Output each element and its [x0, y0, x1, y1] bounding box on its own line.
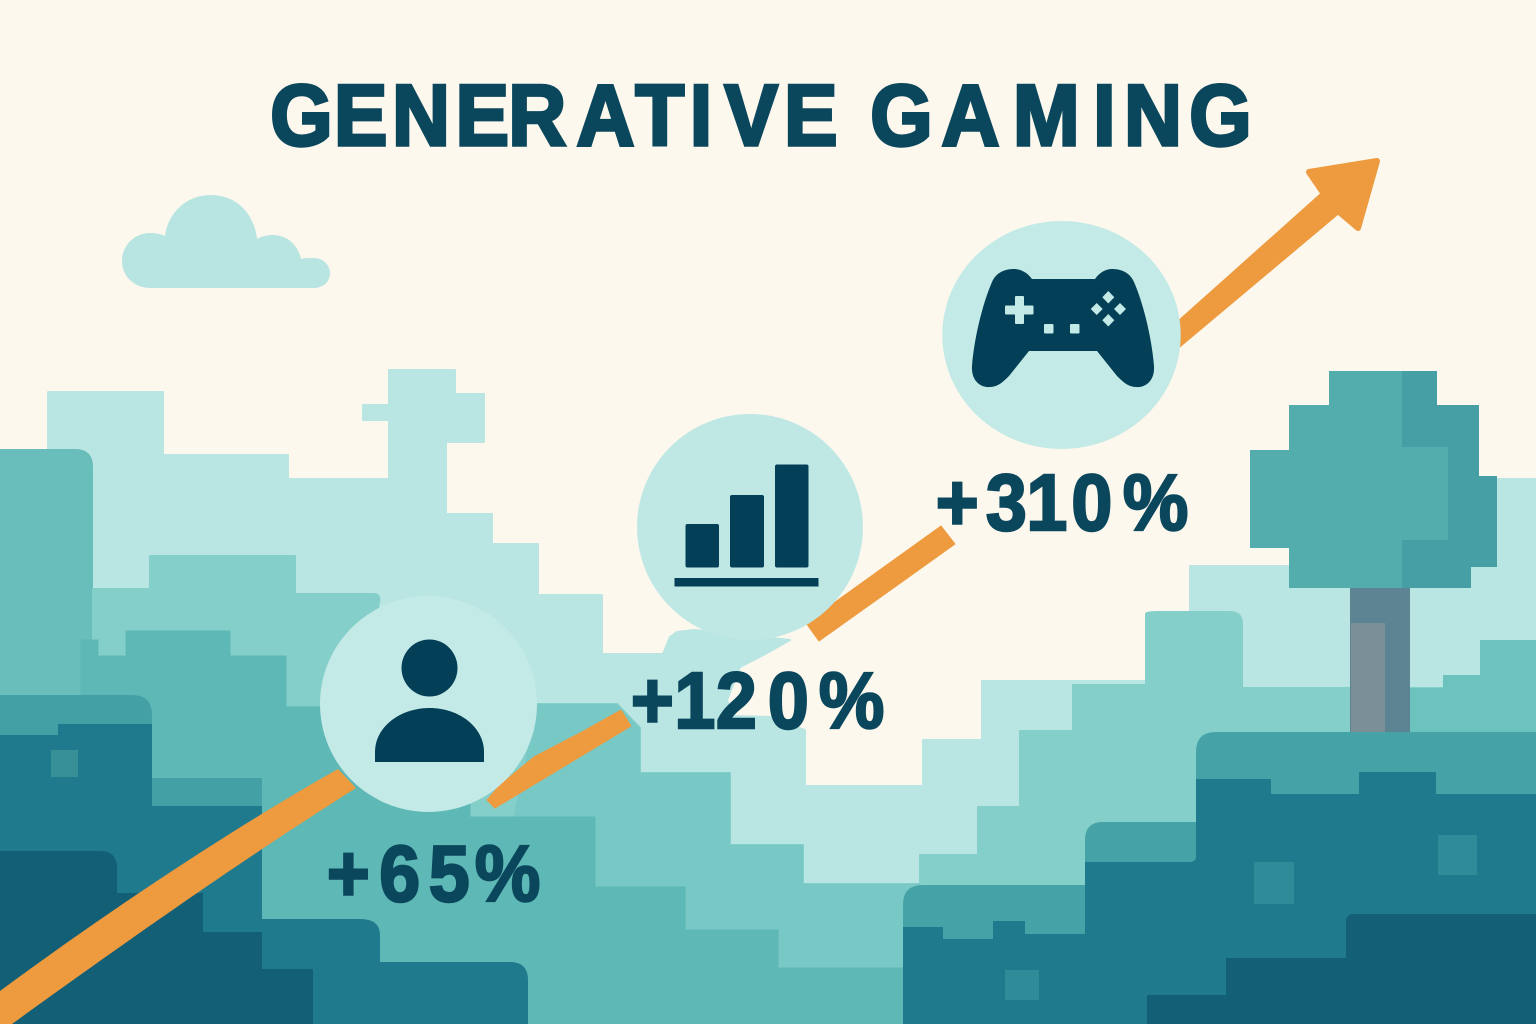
chart bars	[674, 464, 818, 586]
tree trunk	[1350, 587, 1410, 732]
stat: plus 120 percent: +120%	[631, 656, 884, 746]
arrow: growth line head	[1170, 161, 1377, 352]
panel: pixel landscape	[0, 370, 1536, 1024]
person head	[402, 640, 458, 696]
darkest hill right	[1147, 914, 1536, 1024]
deep teal hill right	[903, 772, 1536, 1024]
arrow: growth line segment 1	[0, 769, 356, 1024]
icon: pixel tree	[1250, 371, 1497, 732]
deep teal hill left	[0, 724, 528, 1024]
right mid hill	[1410, 640, 1536, 760]
speech bubble	[637, 414, 863, 640]
middle hills	[93, 556, 1536, 1024]
tree canopy	[1250, 371, 1497, 588]
person body	[375, 708, 484, 762]
icon: bar chart	[637, 414, 863, 640]
distant light hills with cross shape	[0, 370, 1536, 1024]
tree canopy shade	[1402, 371, 1497, 588]
controller body	[972, 269, 1154, 387]
darkest hill left	[0, 851, 313, 1024]
small pixel blocks right	[1005, 835, 1477, 1000]
icon: cloud	[122, 195, 330, 288]
dark teal band left	[0, 695, 262, 830]
title: GENERATIVE GAMING	[270, 67, 1252, 164]
stat: plus 65 percent: +65%	[327, 829, 540, 919]
teal band right	[903, 732, 1536, 950]
controller circle	[942, 221, 1181, 449]
small pixel block left	[51, 750, 78, 777]
controller buttons	[1005, 291, 1126, 334]
icon: game controller	[942, 221, 1181, 449]
icon: person	[320, 596, 537, 812]
person circle	[320, 596, 537, 812]
central mid hill	[470, 704, 920, 1024]
front mid hills	[0, 631, 905, 1024]
arrow: growth line segment 2	[487, 710, 631, 808]
stat: plus 310 percent: +310%	[936, 458, 1188, 548]
left tall column	[0, 449, 93, 720]
arrow: growth line segment 3	[806, 526, 955, 641]
